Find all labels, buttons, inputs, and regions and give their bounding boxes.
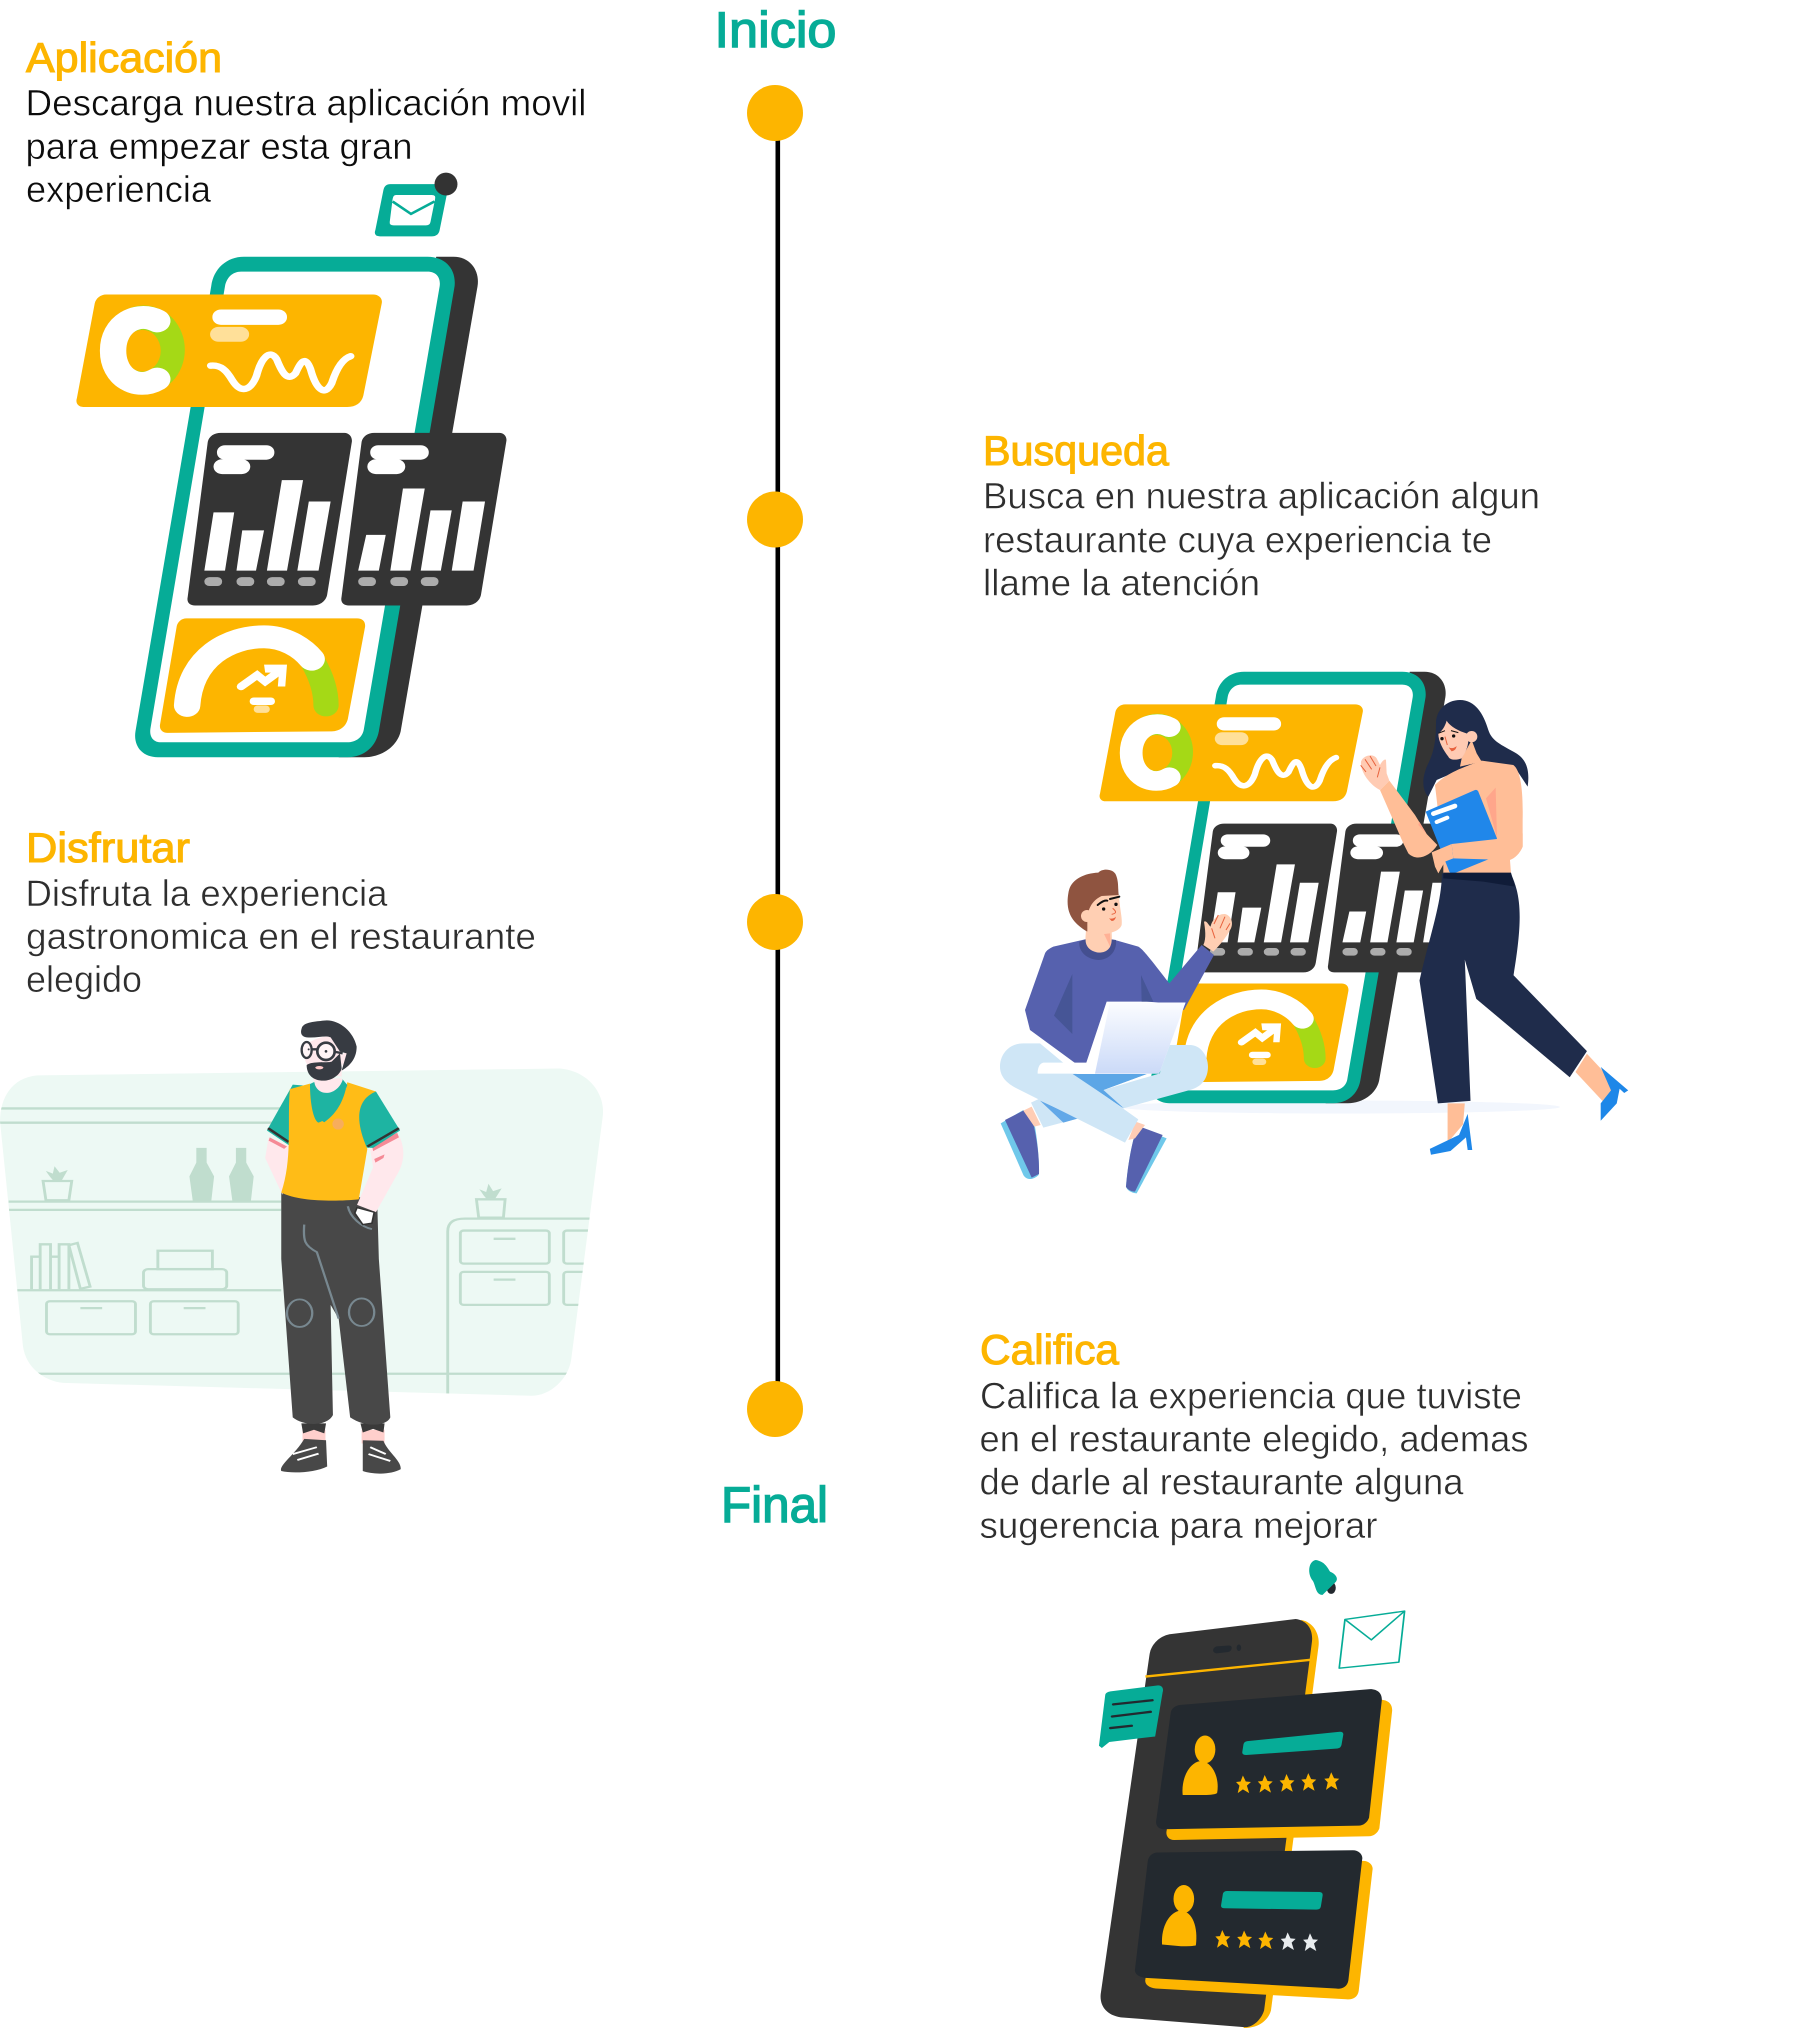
- card: gauge: [160, 618, 365, 733]
- review card 2: [1135, 1850, 1373, 1999]
- step description: experiencia: [26, 169, 211, 210]
- shoes: [1001, 1110, 1039, 1179]
- text block: Busqueda: [983, 427, 1540, 604]
- phone frame: [135, 257, 455, 757]
- review card 1: [1156, 1689, 1392, 1840]
- trousers: [281, 1192, 390, 1425]
- hair: [301, 1020, 357, 1071]
- timeline dot 4: [747, 1381, 803, 1437]
- step description: [983, 476, 1540, 604]
- left leg: [1000, 1043, 1138, 1143]
- step title: Aplicación: [26, 34, 222, 81]
- body: [265, 1082, 403, 1474]
- timeline dot 2: [747, 492, 803, 548]
- chat bubble: [1099, 1685, 1163, 1748]
- step title: Disfrutar: [26, 824, 190, 871]
- neck: [1460, 740, 1482, 767]
- watch: [355, 1208, 374, 1225]
- step description: [980, 1376, 1528, 1546]
- background blob: [0, 1069, 603, 1396]
- glasses: [317, 1043, 335, 1060]
- lower leg: [1031, 1098, 1078, 1128]
- phone divider line: [1145, 1660, 1311, 1677]
- card: bar chart left: [187, 433, 352, 605]
- face: [1438, 721, 1468, 760]
- step description: [26, 873, 536, 1000]
- shoes: [281, 1439, 327, 1472]
- collar: [310, 1079, 347, 1123]
- step description: llame la atención: [983, 562, 1260, 604]
- phone yellow edge: [1221, 1620, 1319, 2028]
- face: [1087, 895, 1122, 934]
- icon: envelope: [1339, 1611, 1405, 1668]
- icon: bell: [1309, 1560, 1337, 1595]
- socks: [302, 1430, 385, 1444]
- phone speaker: [1213, 1645, 1241, 1653]
- step description: [26, 82, 586, 210]
- ankles: [1023, 1107, 1145, 1140]
- card: top chart: [76, 295, 382, 407]
- step description: Disfruta la experiencia: [26, 873, 388, 914]
- shelves and furniture: [0, 1108, 604, 1393]
- timeline dot 3: [747, 894, 803, 950]
- cuffs: [301, 1423, 385, 1433]
- text block: Disfrutar: [26, 824, 536, 1000]
- illustration: seated man with laptop: [1000, 870, 1232, 1193]
- illustration: ground shadow: [1120, 1100, 1560, 1114]
- timeline dot 1: [747, 85, 803, 141]
- card: bar chart right: [341, 433, 506, 605]
- laptop: [1038, 1002, 1186, 1074]
- lower body: [1000, 1043, 1208, 1193]
- hair: [1068, 870, 1119, 932]
- timeline: [747, 85, 803, 1437]
- text block: Califica: [980, 1326, 1528, 1546]
- illustration: phone with people: [1100, 672, 1470, 1103]
- lap shadow: [1073, 1074, 1147, 1108]
- neck: [313, 1078, 343, 1093]
- step description: restaurante cuya experiencia te: [983, 520, 1492, 560]
- neck: [1085, 930, 1112, 953]
- face: [305, 1037, 342, 1077]
- hair: [1423, 700, 1528, 797]
- step description: sugerencia para mejorar: [980, 1505, 1378, 1546]
- upper body: [1361, 700, 1528, 887]
- step description: gastronomica en el restaurante: [26, 916, 536, 957]
- step description: en el restaurante elegido, ademas: [980, 1418, 1528, 1460]
- phone illustration: app dashboard: [76, 257, 506, 757]
- step description: Busca en nuestra aplicación algun: [983, 476, 1540, 516]
- hand: [1361, 755, 1389, 790]
- illustration: kitchen background: [0, 1069, 604, 1396]
- phone screen: [150, 272, 440, 742]
- illustration: man with glasses: [265, 1020, 403, 1474]
- illustration: phone with reviews: [1099, 1560, 1405, 2028]
- t-shirt: [267, 1085, 400, 1148]
- phone back: [339, 257, 478, 757]
- icon: mail notification: [375, 173, 457, 236]
- collar: [1079, 939, 1116, 960]
- phone body: [1101, 1619, 1312, 2027]
- heading: Final: Final: [721, 1477, 828, 1533]
- sweater: [1025, 939, 1214, 1067]
- heading: Inicio: Inicio: [714, 2, 836, 58]
- forearm over folder: [1452, 833, 1523, 860]
- folder: [1426, 790, 1497, 874]
- illustration: standing woman: [1361, 700, 1628, 1155]
- hand: [1203, 914, 1232, 952]
- torso: [1435, 761, 1523, 873]
- step description: de darle al restaurante alguna: [980, 1462, 1464, 1502]
- arms: [265, 1137, 290, 1195]
- upper body: [1025, 870, 1232, 1067]
- right leg: [1103, 1045, 1208, 1108]
- step title: Busqueda: [983, 427, 1170, 474]
- step description: para empezar esta gran: [26, 126, 412, 167]
- beard: [307, 1053, 342, 1081]
- step description: Descarga nuestra aplicación movil: [26, 82, 586, 124]
- step title: Califica: [980, 1326, 1120, 1373]
- head: [301, 1020, 357, 1123]
- raised arm: [1380, 781, 1437, 857]
- waistband: [1443, 873, 1515, 887]
- plants and bottles: [46, 1148, 502, 1202]
- text block: Aplicación: [26, 34, 586, 210]
- step description: elegido: [26, 959, 142, 1000]
- vest: [281, 1082, 376, 1201]
- step description: Califica la experiencia que tuviste: [980, 1376, 1522, 1416]
- trousers and legs: [1420, 873, 1628, 1155]
